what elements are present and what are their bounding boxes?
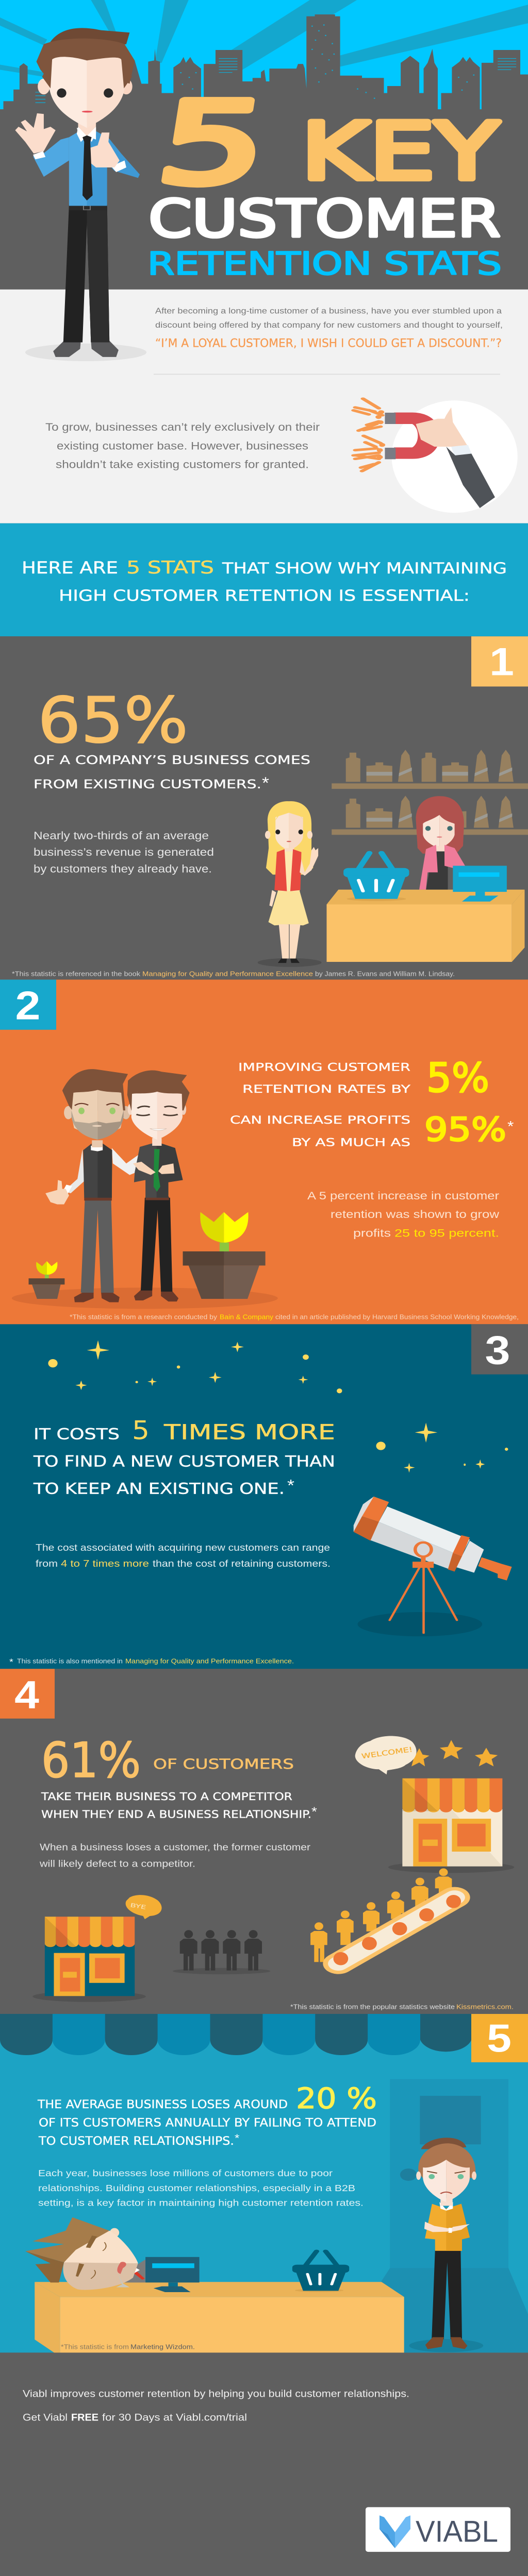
small plant — [29, 1261, 64, 1299]
panel: stat 1 — [0, 636, 528, 980]
panel: stat 2 — [0, 979, 528, 1324]
badge 5 — [471, 2014, 528, 2062]
badge 5: 5 — [487, 2017, 512, 2060]
stat heading: WHEN THEY END A BUSINESS RELATIONSHIP. — [41, 1809, 311, 1821]
title: 5: 5 — [150, 79, 276, 209]
stat heading — [41, 1791, 317, 1821]
stat heading: OF ITS CUSTOMERS ANNUALLY BY FAILING TO ATTEND — [39, 2116, 376, 2129]
of customers label: OF CUSTOMERS — [153, 1756, 294, 1772]
stat description: When a business loses a customer, the former customer — [40, 1842, 310, 1853]
illustration: bye store — [32, 1895, 162, 2002]
badge 4 — [0, 1669, 55, 1719]
stat description — [34, 829, 214, 875]
footnote 3 — [9, 1657, 294, 1667]
stat heading: IMPROVING CUSTOMER — [238, 1061, 410, 1074]
badge 4: 4 — [14, 1673, 39, 1717]
footnote 3: Managing for Quality and Performance Excellence. — [125, 1657, 294, 1665]
title: KEY: KEY — [301, 106, 499, 197]
stat heading — [230, 1061, 410, 1149]
illustration: stars — [48, 1341, 508, 1472]
banner heading: HIGH CUSTOMER RETENTION IS ESSENTIAL: — [59, 587, 470, 605]
badge 2: 2 — [15, 983, 40, 1028]
stat heading: TO KEEP AN EXISTING ONE. — [33, 1480, 285, 1498]
growth paragraph — [45, 420, 320, 470]
stat description — [39, 1842, 310, 1869]
register monitor — [145, 2257, 200, 2292]
stat description: profits — [353, 1227, 391, 1239]
growth paragraph: existing customer base. However, businesses — [57, 439, 308, 452]
stat description: The cost associated with acquiring new customers can range — [36, 1543, 330, 1553]
stat heading: * — [262, 774, 269, 792]
stat heading: TO FIND A NEW CUSTOMER THAN — [33, 1453, 335, 1470]
footnote 1: *This statistic is referenced in the book — [12, 970, 141, 978]
cash register monitor — [453, 866, 507, 902]
footnote 4: Kissmetrics.com. — [456, 2003, 514, 2011]
badge 1 — [471, 636, 528, 687]
statistic 61%: 61% — [41, 1732, 141, 1788]
Viabl logo — [366, 2507, 510, 2552]
conveyor belt — [334, 1895, 461, 1965]
light intro background — [0, 290, 528, 523]
footnote 2: Bain & Company — [220, 1313, 274, 1321]
intro paragraph — [155, 307, 503, 330]
illustration: store scene — [258, 750, 528, 967]
stat description: setting, is a key factor in maintaining high customer retention rates. — [38, 2198, 364, 2208]
panel: intro banner — [0, 523, 528, 636]
stat description: 25 to 95 percent. — [394, 1227, 499, 1239]
footnote 1: by James R. Evans and William M. Lindsay. — [315, 970, 455, 978]
counter — [326, 890, 524, 962]
basket — [343, 853, 409, 901]
footnote 5: *This statistic is from — [61, 2343, 129, 2351]
footnote 1: Managing for Quality and Performance Excellence — [142, 970, 313, 978]
stat heading: * — [235, 2131, 240, 2144]
sleeping clerk — [25, 2217, 145, 2290]
stat heading: BY AS MUCH AS — [292, 1137, 410, 1149]
title: CUSTOMER: CUSTOMER — [148, 189, 501, 249]
stat description: from — [36, 1558, 58, 1569]
stat heading: TAKE THEIR BUSINESS TO A COMPETITOR — [41, 1791, 292, 1803]
statistic 95%: * — [507, 1119, 514, 1135]
stat description: Nearly two-thirds of an average — [34, 829, 209, 842]
panel: footer — [0, 2352, 528, 2576]
closing message: Get Viabl — [23, 2412, 68, 2423]
stat heading: THE AVERAGE BUSINESS LOSES AROUND — [37, 2098, 288, 2111]
stat description: will likely defect to a competitor. — [39, 1858, 195, 1869]
stat description: A 5 percent increase in customer — [307, 1189, 500, 1202]
intro paragraph: After becoming a long-time customer of a business, have you ever stumbled upon a — [155, 307, 502, 315]
banner heading: THAT SHOW WHY MAINTAINING — [222, 560, 507, 578]
stat heading — [33, 1416, 335, 1498]
smiling man — [127, 1071, 190, 1301]
stat description: retention was shown to grow — [331, 1208, 500, 1221]
statistic 95%: 95% — [424, 1111, 506, 1149]
stat description — [36, 1543, 331, 1569]
stat heading — [37, 2098, 376, 2148]
footnote 1 — [12, 970, 455, 978]
footnote 3: This statistic is also mentioned in — [17, 1657, 123, 1665]
footnote 5 — [61, 2343, 195, 2351]
stat heading: IT COSTS — [34, 1426, 120, 1443]
footnote 4: *This statistic is from the popular statistics website — [290, 2003, 455, 2011]
stat description: by customers they already have. — [34, 862, 212, 875]
large plant — [183, 1212, 266, 1299]
conveyor customers — [310, 1869, 452, 1962]
stat description — [307, 1189, 500, 1239]
illustration: telescope — [354, 1497, 512, 1636]
logo wordmark: VIABL — [416, 2515, 498, 2549]
door — [381, 2079, 528, 2352]
stat heading: * — [287, 1476, 294, 1495]
frustrated customer — [409, 2138, 483, 2352]
illustration: welcome store — [355, 1736, 514, 1873]
stat heading: OF A COMPANY’S BUSINESS COMES — [34, 753, 310, 767]
stat description: than the cost of retaining customers. — [153, 1558, 331, 1569]
skyline — [0, 14, 528, 290]
stat description: 4 to 7 times more — [61, 1558, 149, 1569]
badge 3 — [471, 1324, 528, 1375]
statistic 65%: 65% — [38, 684, 188, 757]
shelves — [332, 750, 528, 835]
closing message: Viabl improves customer retention by helping you build customer relationships. — [23, 2388, 409, 2399]
closing message: for 30 Days at Viabl.com/trial — [102, 2412, 247, 2423]
footnote 3: * — [9, 1657, 13, 1667]
bye text: BYE — [129, 1902, 147, 1911]
footnote 5: Marketing Wizdom. — [130, 2343, 195, 2351]
bye speech bubble — [126, 1895, 162, 1919]
intro paragraph: discount being offered by that company for new customers and thought to yourself, — [155, 320, 503, 330]
stat description: business’s revenue is generated — [34, 845, 214, 858]
badge 3: 3 — [485, 1328, 510, 1372]
illustration: two businessmen and plants — [12, 1069, 278, 1309]
logo mark — [380, 2515, 410, 2548]
footnote 2: *This statistic is from a research conducted by — [70, 1313, 218, 1321]
panel: stat 4 — [0, 1669, 528, 2014]
stat heading: FROM EXISTING CUSTOMERS. — [34, 777, 261, 791]
illustration: businessman waving — [15, 28, 146, 361]
illustration: leaving customers — [173, 1869, 461, 1974]
stat heading — [34, 753, 310, 792]
closing message: FREE — [71, 2412, 98, 2423]
stat heading: * — [311, 1805, 317, 1819]
stat heading: RETENTION RATES BY — [242, 1083, 410, 1095]
title: RETENTION STATS: RETENTION STATS — [147, 246, 502, 282]
banner heading — [22, 558, 507, 605]
footnote 2 — [70, 1313, 519, 1321]
basket — [292, 2251, 349, 2292]
statistic 5%: 5% — [426, 1055, 489, 1101]
stat description: Each year, businesses lose millions of customers due to poor — [38, 2168, 333, 2179]
panel: hero — [0, 0, 528, 523]
growth paragraph: To grow, businesses can’t rely exclusively on their — [45, 420, 320, 433]
welcome speech bubble — [355, 1736, 417, 1774]
badge 1: 1 — [489, 640, 514, 684]
illustration: magnet attracting customers — [354, 399, 518, 513]
badge 2 — [0, 979, 56, 1030]
stat heading: TIMES MORE — [163, 1421, 335, 1445]
skyline windows — [36, 24, 516, 103]
banner heading: HERE ARE — [22, 558, 118, 578]
statistic 20%: 20 % — [296, 2082, 377, 2115]
closing message — [23, 2388, 409, 2423]
growth paragraph: shouldn’t take existing customers for granted. — [56, 458, 309, 470]
man with beard — [45, 1069, 139, 1302]
counter — [35, 2282, 404, 2353]
stat description — [38, 2168, 364, 2208]
shopper — [258, 801, 322, 967]
welcome text: WELCOME! — [361, 1746, 413, 1760]
panel: stat 5 — [0, 2014, 528, 2353]
stat description: relationships. Building customer relationships, especially in a B2B — [38, 2183, 355, 2194]
stat heading: TO CUSTOMER RELATIONSHIPS. — [38, 2134, 234, 2148]
cashier — [416, 796, 466, 890]
banner heading: 5 STATS — [126, 558, 214, 578]
stat heading: 5 — [132, 1416, 150, 1445]
stat heading: CAN INCREASE PROFITS — [230, 1114, 410, 1127]
illustration: awning, door and counter — [0, 2014, 528, 2353]
panel: stat 3 — [0, 1324, 528, 1669]
